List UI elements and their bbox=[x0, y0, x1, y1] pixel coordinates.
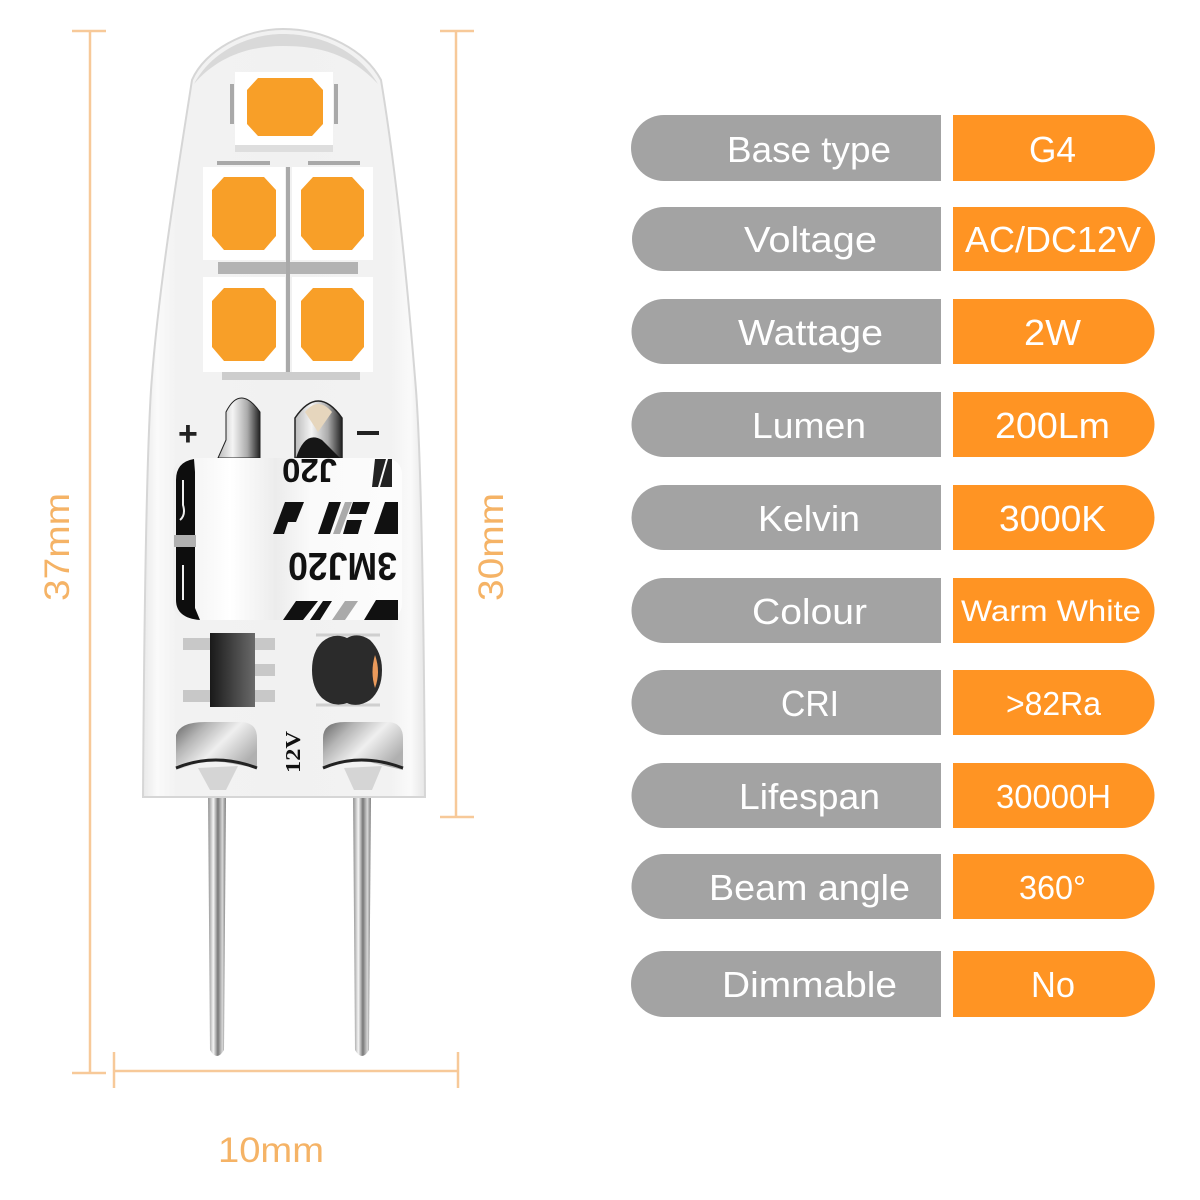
spec row: Beam angle bbox=[632, 854, 1154, 919]
silicone body bbox=[143, 29, 425, 797]
LED chips bbox=[203, 72, 373, 380]
spec row: Base type bbox=[631, 115, 1155, 181]
electrolytic capacitor: 3MJ20 bbox=[288, 544, 397, 587]
spec row: Beam angle: 360° bbox=[1019, 869, 1086, 906]
dimension: 10mm width: 10mm bbox=[218, 1131, 324, 1170]
IC chip bbox=[183, 633, 275, 707]
polarity marks bbox=[178, 415, 379, 453]
spec row: Colour: Warm White bbox=[961, 595, 1141, 628]
spec row: Voltage: AC/DC12V bbox=[965, 219, 1141, 260]
spec row: Lifespan: 30000H bbox=[996, 778, 1111, 815]
spec row: Lumen bbox=[632, 392, 1154, 457]
dimension: 37mm overall height bbox=[38, 31, 106, 1073]
spec row: Colour: Colour bbox=[752, 591, 867, 632]
spec row: Lumen: Lumen bbox=[752, 405, 866, 446]
spec row: Wattage: 2W bbox=[1024, 312, 1081, 353]
spec row: Kelvin bbox=[632, 485, 1154, 550]
spec row: Beam angle: Beam angle bbox=[709, 867, 910, 908]
dimension: 30mm body height: 30mm bbox=[472, 493, 511, 601]
spec row: Lifespan: Lifespan bbox=[739, 776, 880, 817]
solder pads bbox=[176, 722, 403, 790]
polarity marks: + bbox=[178, 415, 198, 453]
electrolytic capacitor bbox=[173, 452, 402, 620]
dimension: 37mm overall height: 37mm bbox=[38, 493, 77, 601]
voltage mark: 12V bbox=[281, 731, 305, 773]
spec row: CRI: >82Ra bbox=[1006, 685, 1102, 722]
spec row: Dimmable bbox=[631, 951, 1155, 1017]
spec row: Base type: G4 bbox=[1029, 129, 1076, 170]
spec row: Dimmable: Dimmable bbox=[722, 964, 897, 1005]
spec row: Wattage bbox=[632, 299, 1154, 364]
dome highlight bbox=[194, 34, 378, 84]
spec row: Voltage bbox=[632, 207, 1155, 271]
dimension: 30mm body height bbox=[440, 31, 511, 817]
spec row: Kelvin: Kelvin bbox=[758, 498, 860, 539]
illustration: G4 LED bulb bbox=[143, 29, 425, 1056]
spec row: Lifespan bbox=[632, 763, 1154, 828]
spec row: Kelvin: 3000K bbox=[999, 498, 1106, 539]
dimension: 10mm width bbox=[114, 1052, 458, 1170]
spec row: Lumen: 200Lm bbox=[995, 405, 1110, 446]
spec row: Colour bbox=[632, 578, 1154, 643]
metal pins bbox=[208, 790, 371, 1056]
inductor bbox=[312, 635, 382, 705]
spec row: Base type: Base type bbox=[727, 129, 891, 170]
spec row: CRI bbox=[632, 670, 1154, 735]
spec row: Dimmable: No bbox=[1031, 964, 1075, 1005]
spec row: Voltage: Voltage bbox=[744, 219, 877, 260]
spec row: CRI: CRI bbox=[781, 683, 839, 724]
spec row: Wattage: Wattage bbox=[738, 312, 883, 353]
electrolytic capacitor: J20 bbox=[282, 452, 337, 489]
capacitor leads bbox=[218, 398, 342, 458]
